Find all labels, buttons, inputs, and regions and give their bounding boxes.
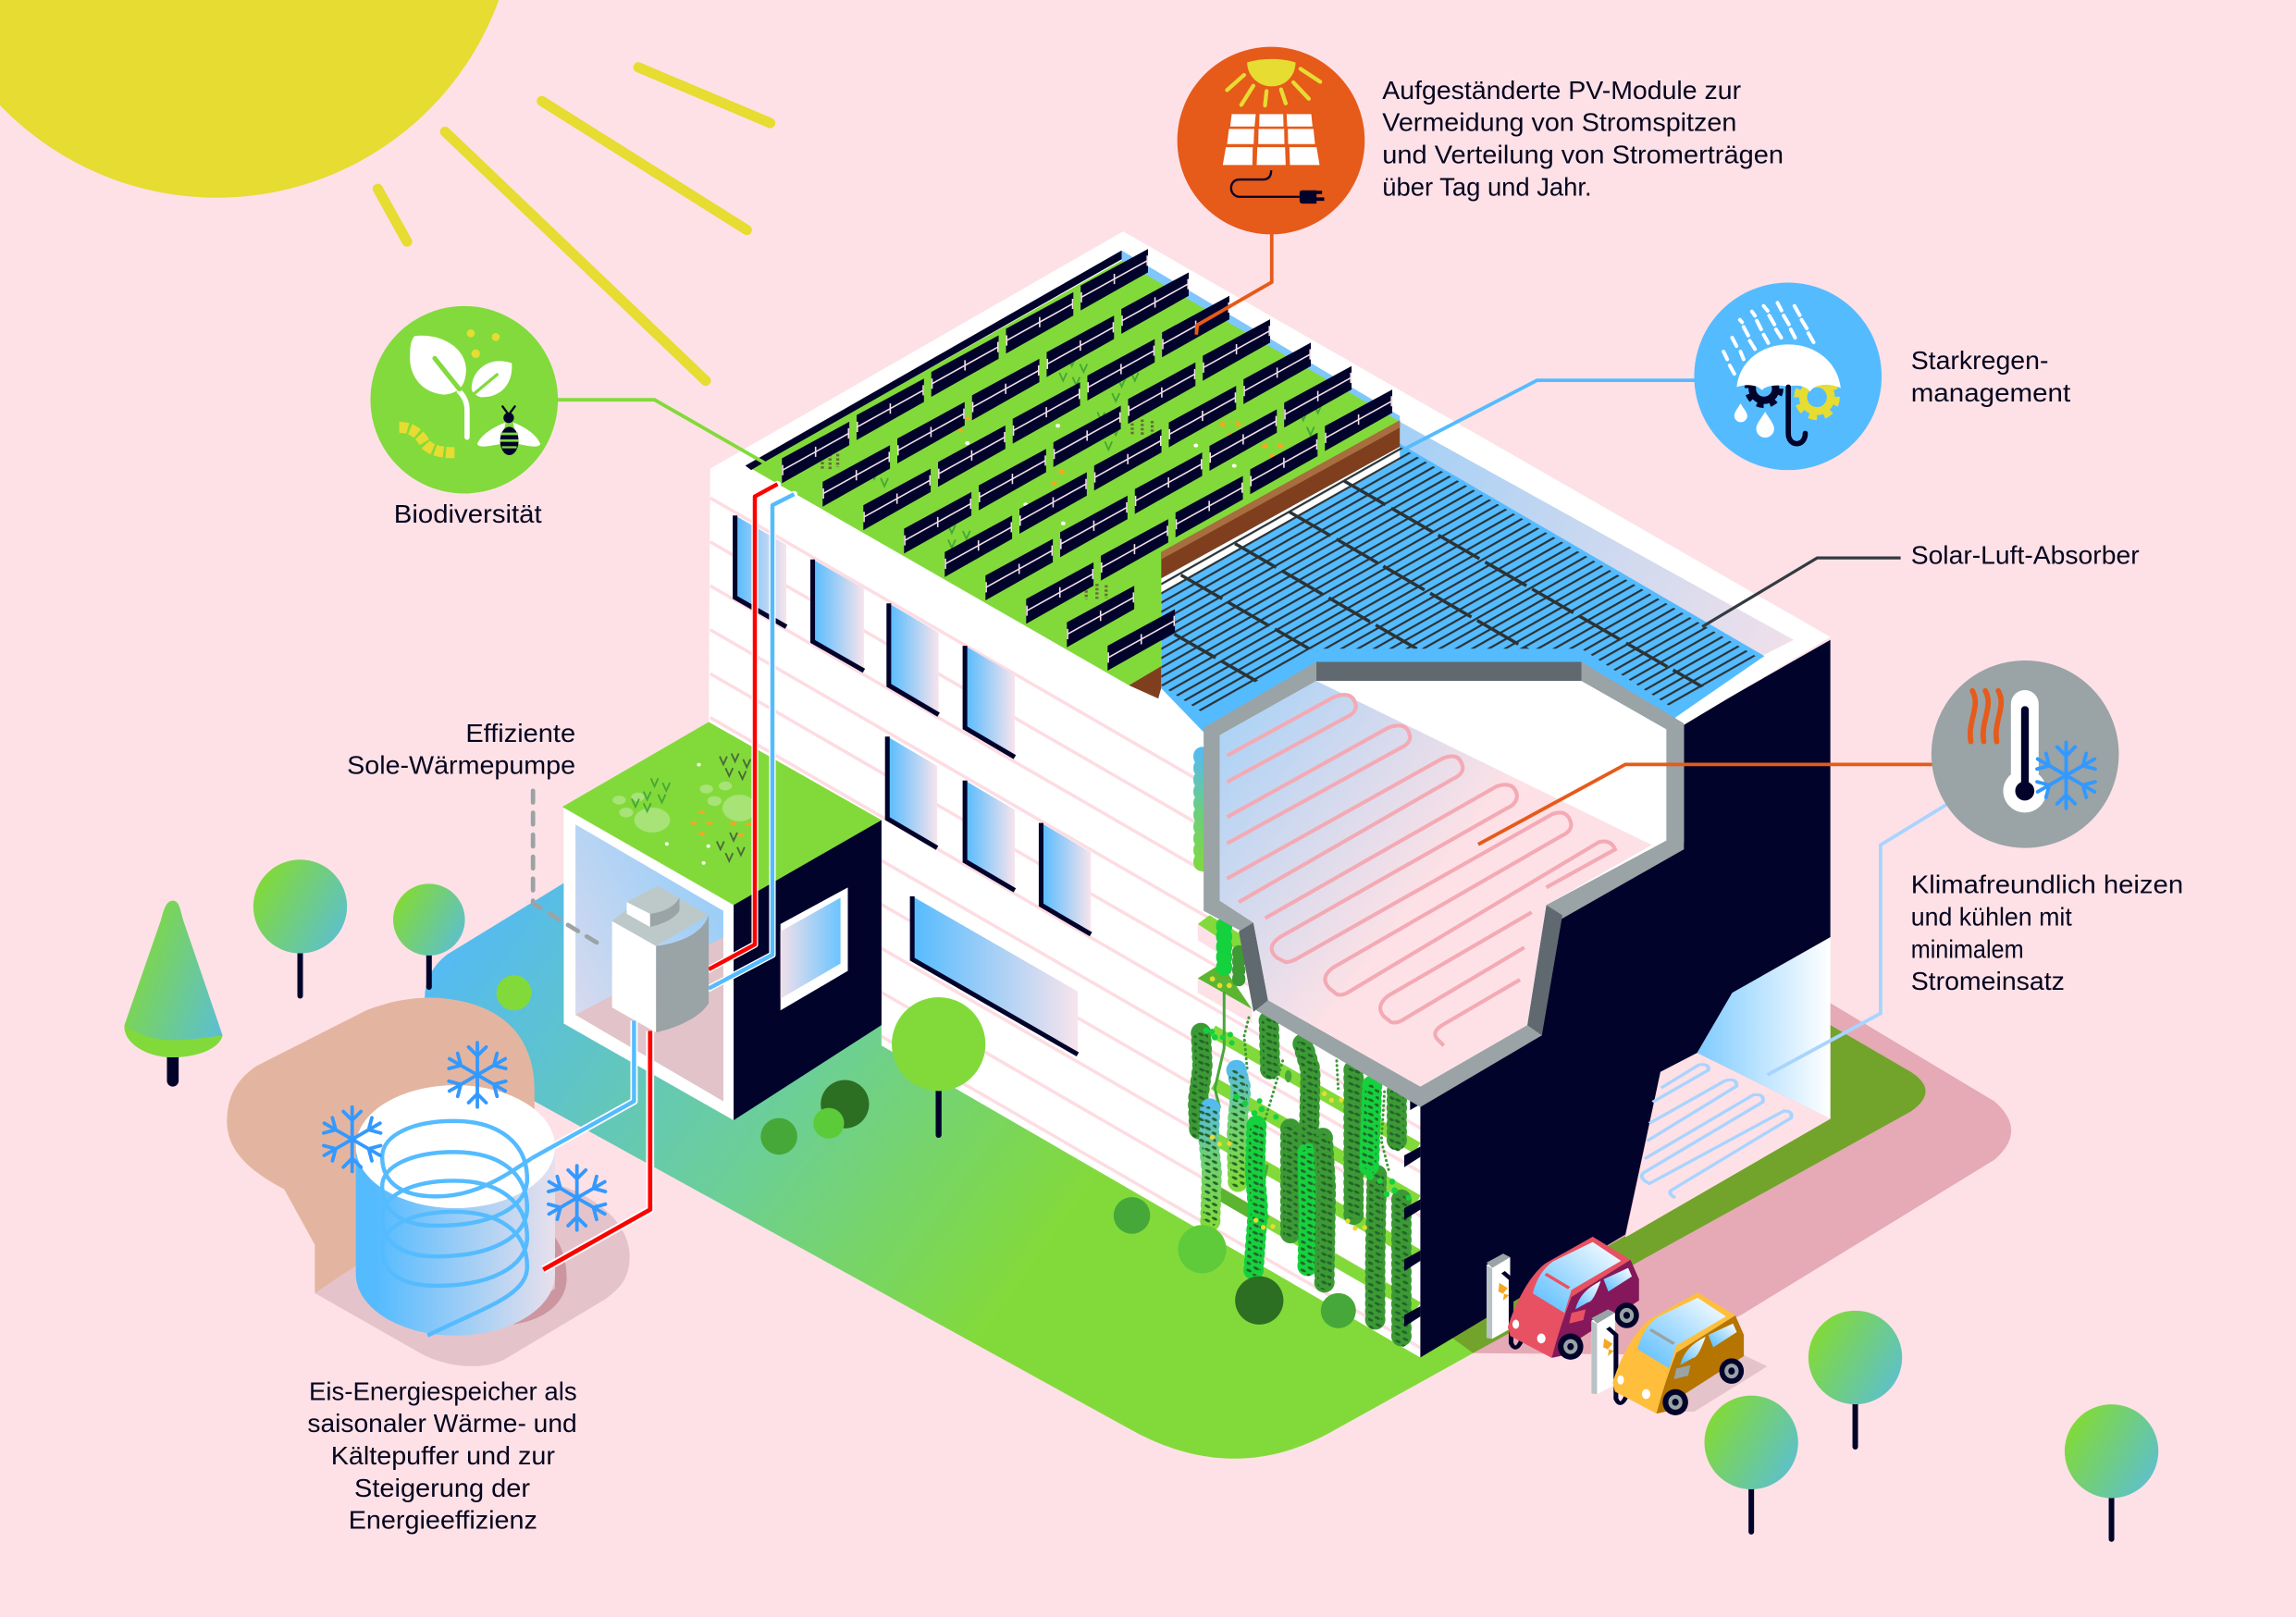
green facade [1198,756,1417,1343]
pavement strip [1473,1003,2011,1354]
text: biodiversity: Biodiversität [394,500,542,528]
garage floor coil [1642,1065,1792,1198]
soil band [1161,420,1400,578]
PV module rows [782,249,1392,671]
snowflake [445,1043,510,1107]
icon: biodiversity circle [370,306,558,493]
right navy wall [1420,640,1831,1357]
text: PV modules [1382,76,1784,201]
solar air absorber [1161,448,1756,711]
snowflake [545,1166,610,1230]
ground lawn [425,883,1473,1459]
text: ice energy storage: Steigerung der [354,1474,530,1502]
windows [735,515,1091,1055]
tree [253,859,347,995]
solar absorber gradient margin [1400,422,1794,659]
text: climate friendly heating: minimalem [1911,934,2024,963]
tree [2065,1404,2158,1539]
front bushes [1114,1197,1356,1328]
text: climate friendly heating: Stromeinsatz [1911,967,2065,995]
bush [497,975,532,1010]
icon: thermometer circle [1932,660,2118,848]
leader: solar air absorber [1702,558,1901,627]
text: PV modules: über Tag und Jahr. [1382,172,1592,201]
yellow car shadow [1640,1353,1768,1412]
annex building [562,722,882,1120]
leader: biodiversity [555,400,764,463]
text: solar air absorber: Solar-Luft-Absorber [1911,540,2140,569]
red car [1508,1237,1639,1360]
text: PV modules: und Verteilung von Stromerträgen [1382,141,1784,169]
green roof [746,251,1400,698]
roof [710,231,1831,754]
annex green roof [562,722,882,905]
text: heavy rain management: Starkregen- [1911,346,2048,375]
bushes [760,1080,869,1154]
charging station yellow car [1591,1309,1634,1403]
text: ice energy storage: saisonaler Wärme- und [307,1409,577,1438]
cone tree [124,901,223,1080]
snowflake [320,1107,385,1171]
text: climate friendly heating [1911,870,2183,995]
tree [393,883,465,987]
floor slab notches [1404,1092,1420,1327]
text: ice energy storage: Kältepuffer und zur [331,1441,555,1470]
brown soil around storage [227,997,558,1318]
building section cutaway [1204,662,1684,1107]
plants and flowers [822,416,1283,600]
garage opening [1625,937,1831,1238]
tree [1808,1311,1902,1447]
yellow car [1612,1292,1744,1415]
coil [382,1121,532,1336]
heat pump [612,886,709,1032]
building left wall [709,469,1421,1358]
tree in front of wall [892,997,985,1135]
text: ice energy storage [307,1376,577,1535]
back edge [746,251,1122,470]
text: heavy rain management [1911,346,2071,407]
sun [0,0,517,198]
text: climate friendly heating: und kühlen mit [1911,902,2072,931]
upper balconies with plants [1198,756,1265,1024]
pipes [532,484,794,1270]
frame [1204,662,1684,1107]
blue roof surface [1161,444,1764,733]
floor [1220,681,1652,1087]
climbing plants [1198,993,1412,1343]
sun rays [377,68,771,381]
text: heat pump: Effiziente [465,719,575,747]
text: climate friendly heating: Klimafreundlich heizen [1911,870,2183,899]
text: heavy rain management: management [1911,378,2071,407]
text: heat pump: Sole-Wärmepumpe [347,751,575,780]
lawn strip behind building [1420,1025,1926,1353]
leader: PV modules [1196,231,1272,335]
interior [1220,681,1666,1087]
text: ice energy storage: Eis-Energiespeicher als [309,1376,577,1405]
leader: heating [1478,764,1936,845]
storage shadow [315,1185,630,1366]
dashed leader: heat pump [533,791,605,947]
ice storage tank [356,1085,567,1336]
leader: cooling [1768,804,1947,1075]
text: PV modules: Vermeidung von Stromspitzen [1382,108,1736,137]
text: PV modules: Aufgeständerte PV-Module zur [1382,76,1741,105]
tree [1705,1396,1798,1532]
leader: heavy rain [1405,380,1698,449]
underfloor heating coil [1227,695,1615,1045]
icon: solar panel circle [1178,47,1364,234]
icon: heavy rain circle [1694,283,1882,470]
text: heat pump [347,719,575,780]
charging station red car [1487,1253,1529,1348]
green shelves [1213,1031,1417,1308]
text: ice energy storage: Energieeffizienz [349,1506,537,1535]
